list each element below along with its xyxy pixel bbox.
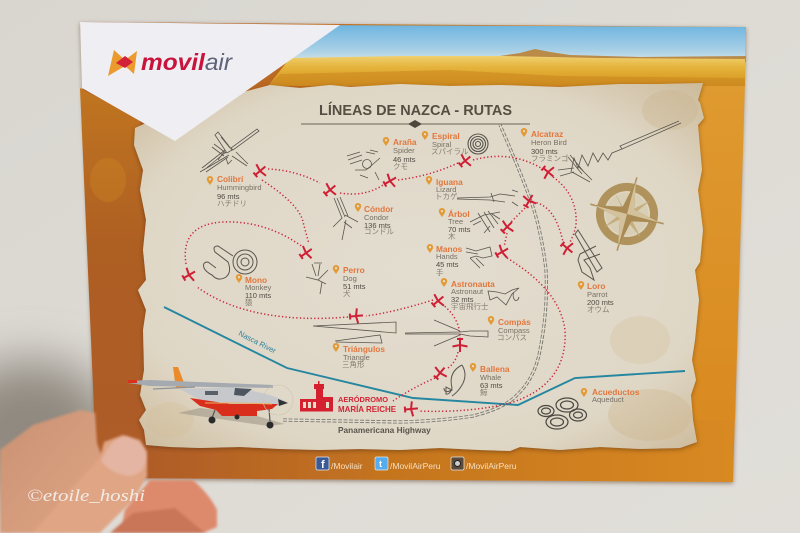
label: Triángulos (333, 343, 385, 369)
label: Loro: Parrot (587, 290, 608, 299)
title divider (301, 120, 530, 128)
geoglyph: compass lines (405, 320, 488, 346)
geoglyph: dog (306, 263, 328, 294)
label: Astronauta (441, 278, 495, 311)
label: Astronauta: 宇宙飛行士 (451, 301, 489, 311)
label: Ballena (470, 363, 510, 397)
label: Alcatraz: 300 mts (531, 147, 558, 156)
label: Mono: Monkey (245, 283, 272, 292)
label: Espiral: Spiral (432, 140, 452, 149)
airport name (338, 395, 396, 414)
label: Astronauta: 32 mts (451, 295, 474, 304)
label: Triángulos: Triángulos (343, 344, 385, 354)
label: Perro (333, 265, 366, 298)
label: Alcatraz: Alcatraz (531, 129, 563, 139)
logo wordmark: movilair (141, 49, 233, 75)
geoglyph: hands (466, 247, 492, 268)
label: Loro: Loro (587, 281, 605, 291)
label: Compás: Compass (498, 326, 530, 335)
compass rose (580, 167, 674, 261)
geoglyph: whale (444, 365, 465, 396)
label: Astronauta: Astronaut (451, 287, 484, 296)
label: Compás (488, 316, 531, 342)
label: Perro: 犬 (343, 288, 351, 298)
label: Cóndor: Cóndor (364, 204, 394, 214)
label: Espiral (422, 131, 469, 156)
geoglyph: astronaut (488, 288, 519, 305)
label: Espiral: Espiral (432, 131, 460, 141)
label: Cóndor: 136 mts (364, 221, 391, 230)
geoglyph: spider (347, 150, 380, 180)
label: Astronauta: Astronauta (451, 279, 495, 289)
social: Instagram: /MovilAirPeru (466, 461, 517, 471)
label: Acueductos: Aqueduct (592, 395, 625, 404)
geoglyph: parrot (575, 230, 602, 280)
label: Manos: Manos (436, 244, 463, 254)
label: Araña (383, 137, 417, 171)
geoglyph: iguana (457, 190, 518, 206)
social: Twitter: t (379, 459, 382, 469)
social: Twitter: /MovilAirPeru (390, 461, 441, 471)
river label: Nasca River (237, 329, 278, 356)
dotted flight routes (185, 156, 576, 411)
label: Ballena: Ballena (480, 364, 510, 374)
label: Cóndor (355, 203, 394, 236)
label: Araña: 46 mts (393, 155, 416, 164)
label: Iguana: Iguana (436, 177, 463, 187)
label: Araña: クモ (393, 162, 408, 171)
label: Iguana: Lizard (436, 185, 456, 194)
label: Colibrí: Hummingbird (217, 183, 262, 192)
watermark: ©etoile_hoshi (27, 486, 145, 505)
label: Colibrí: Colibrí (217, 174, 244, 184)
label: Ballena: 63 mts (480, 381, 503, 390)
label: Compás: コンパス (497, 333, 527, 342)
social: Instagram (451, 457, 517, 471)
label: Ballena: 鯨 (480, 387, 488, 397)
label: Mono (236, 274, 272, 307)
social: Facebook (316, 457, 363, 471)
label: Árbol: 70 mts (448, 225, 471, 234)
geoglyph: heron (558, 121, 681, 182)
flyer card (80, 22, 746, 482)
airport control tower icon (300, 381, 333, 412)
label: Espiral: スパイラル (431, 147, 469, 156)
geoglyph: tree (470, 211, 500, 233)
highway label: Panamericana Highway (338, 425, 431, 435)
label: Manos: Hands (436, 252, 458, 261)
hand holding the card (0, 410, 217, 533)
label: Loro: オウム (587, 305, 610, 314)
geoglyph: condor (333, 197, 358, 240)
label: Alcatraz: フラミンゴ (531, 153, 569, 163)
highway (283, 125, 546, 422)
label: Perro: 51 mts (343, 282, 366, 291)
parchment map panel (134, 83, 704, 451)
label: Colibrí: ハチドリ (217, 199, 247, 208)
label: Árbol: Árbol (448, 209, 470, 219)
label: Mono: Mono (245, 275, 267, 285)
white corner banner (80, 22, 340, 141)
label: Alcatraz (521, 128, 569, 163)
label: Árbol: 木 (448, 231, 456, 241)
label: Triángulos: Triangle (343, 353, 370, 362)
label: Manos (427, 244, 463, 277)
geoglyph: monkey (204, 246, 257, 279)
label: Alcatraz: Heron Bird (531, 138, 567, 147)
aeroplane illustration (128, 367, 293, 428)
title: LÍNEAS DE NAZCA - RUTAS (319, 102, 512, 119)
parchment stains (146, 90, 698, 441)
label: Araña: Spider (393, 146, 415, 155)
label: Colibrí: 96 mts (217, 192, 240, 201)
social: Facebook: /Movilair (331, 461, 363, 471)
geoglyph: aqueducts (538, 398, 586, 429)
label: Mono: 猿 (245, 297, 253, 307)
label: Acueductos (581, 387, 640, 404)
label: Perro: Dog (343, 274, 357, 283)
geoglyph: hummingbird (200, 129, 259, 172)
label: Iguana: トカゲ (435, 192, 458, 201)
label: Loro (578, 281, 614, 314)
label: Iguana (426, 176, 463, 201)
label: Loro: 200 mts (587, 298, 614, 307)
sky and dunes header (268, 25, 746, 86)
label: Ballena: Whale (480, 373, 501, 382)
label: Cóndor: コンドル (364, 227, 394, 236)
airport name: MARÍA REICHE (338, 404, 396, 414)
social: Facebook: f (321, 459, 325, 471)
label: Manos: 手 (436, 267, 444, 277)
airport name: AERÓDROMO (338, 395, 388, 404)
geoglyph: spiral (468, 134, 488, 154)
label: Árbol (439, 208, 471, 241)
logo: movilair (108, 49, 233, 76)
label: Mono: 110 mts (245, 291, 271, 300)
label: Cóndor: Condor (364, 213, 389, 222)
label: Perro: Perro (343, 265, 365, 275)
logo mark (108, 50, 137, 76)
label: Colibrí (207, 174, 262, 208)
label: Acueductos: Acueductos (592, 387, 640, 397)
label: Compás: Compás (498, 317, 531, 327)
river (164, 307, 685, 405)
label: Araña: Araña (393, 137, 417, 147)
label: Triángulos: 三角形 (342, 359, 365, 369)
label: Manos: 45 mts (436, 260, 459, 269)
label: Árbol: Tree (448, 217, 463, 226)
social: Twitter (375, 457, 441, 471)
plane markers (179, 151, 577, 417)
geoglyph: triangles (313, 322, 396, 343)
